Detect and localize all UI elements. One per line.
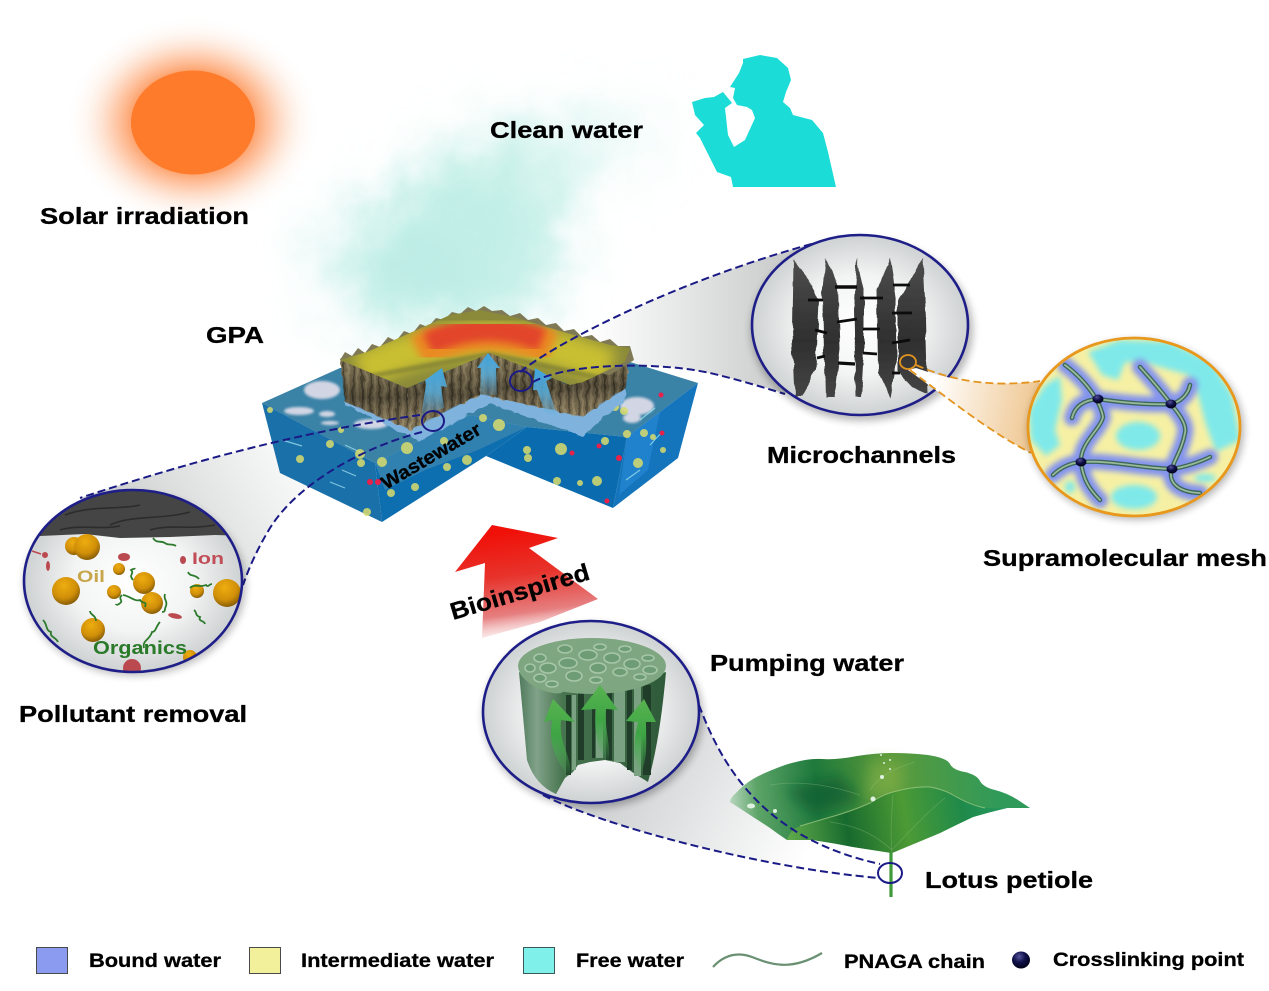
legend: intermediate water: Intermediate water <box>301 950 494 972</box>
front leaf <box>787 787 1030 853</box>
crosslinking points <box>1076 394 1178 474</box>
GPA underside <box>40 491 226 538</box>
icon: sun <box>65 16 321 228</box>
magnifier cone to supramolecular mesh <box>908 368 1040 453</box>
wastewater block right face <box>613 383 698 508</box>
panel: supramolecular mesh lens <box>1028 338 1244 520</box>
heading: GPA: GPA <box>206 322 264 348</box>
label: lotus petiole: Lotus petiole <box>925 867 1093 893</box>
oil droplets <box>52 534 241 664</box>
wastewater block top face <box>262 362 698 463</box>
label: supramolecular mesh: Supramolecular mesh <box>983 545 1267 571</box>
petiole cylinder body <box>519 672 666 794</box>
legend: crosslinking point: Crosslinking point <box>1053 949 1245 971</box>
petiole cut top with cells <box>518 638 666 694</box>
pale surface patches <box>284 381 654 429</box>
foam outer left wall <box>340 358 411 430</box>
label: organics: Organics <box>93 638 187 658</box>
legend: intermediate water <box>250 948 494 974</box>
ions <box>367 392 664 504</box>
legend: PNAGA chain: PNAGA chain <box>844 951 985 973</box>
legend: PNAGA chain <box>713 951 985 973</box>
foam water fringe <box>345 385 626 441</box>
bound water zones <box>1053 365 1210 500</box>
legend <box>36 948 1245 974</box>
oil droplets <box>267 403 666 516</box>
legend: bound water <box>36 948 221 974</box>
orange zoom mark and dashed lines <box>900 355 1040 453</box>
arrow: bioinspired <box>455 525 598 638</box>
GPA evaporator over wastewater block <box>262 300 698 522</box>
foam spiky back edge <box>340 306 634 388</box>
heading: pumping water: Pumping water <box>710 650 904 676</box>
heading: solar irradiation: Solar irradiation <box>40 203 249 229</box>
free water zones <box>1029 340 1240 509</box>
water flow arrows <box>544 685 656 778</box>
legend: free water: Free water <box>576 950 684 972</box>
organic chains <box>43 538 212 648</box>
panel: pumping water lens <box>483 621 703 808</box>
floating debris streaks <box>282 408 662 488</box>
panel: microchannels lens <box>751 235 973 421</box>
magnifier cone to pollutant removal <box>80 415 422 585</box>
wastewater block front face <box>375 415 527 522</box>
dashed lines and zoom mark on petiole <box>543 705 902 883</box>
heading: clean water: Clean water <box>490 117 643 143</box>
magnifier cone to lotus petiole <box>543 705 885 878</box>
vapour channel arrows <box>421 353 558 418</box>
icon: person drinking water <box>692 55 836 187</box>
wastewater block inner face <box>486 427 627 508</box>
crosslink rungs <box>808 285 912 373</box>
background steam: clean water vapour <box>305 110 660 330</box>
microchannel stripes <box>566 685 651 775</box>
heading: pollutant removal: Pollutant removal <box>19 701 247 727</box>
label: oil: Oil <box>77 567 105 586</box>
PNAGA chains <box>1053 365 1210 500</box>
magnifier cone to microchannels <box>520 243 860 394</box>
wastewater block left face <box>262 403 382 522</box>
label: wastewater: Wastewater <box>378 419 486 494</box>
foam outer right wall <box>570 348 630 417</box>
ion particles <box>32 551 186 677</box>
panel: pollutant removal lens <box>20 480 250 677</box>
foam inner right wall <box>480 352 582 417</box>
water droplets <box>747 754 891 813</box>
legend: bound water: Bound water <box>89 950 221 972</box>
legend: free water <box>524 948 684 974</box>
petiole stem <box>889 850 893 897</box>
icon: lotus leaf <box>730 753 1030 897</box>
label: microchannels: Microchannels <box>767 442 956 468</box>
label: ion: Ion <box>192 549 224 568</box>
graphene sheets <box>792 258 928 397</box>
label: bioinspired: Bioinspired <box>447 559 593 626</box>
selection marks and dashed zoom lines on block <box>80 243 815 585</box>
foam top surface with heat map <box>340 310 630 388</box>
leaf veins <box>770 762 945 853</box>
foam inner left wall <box>407 352 490 430</box>
back leaf <box>730 753 1030 853</box>
